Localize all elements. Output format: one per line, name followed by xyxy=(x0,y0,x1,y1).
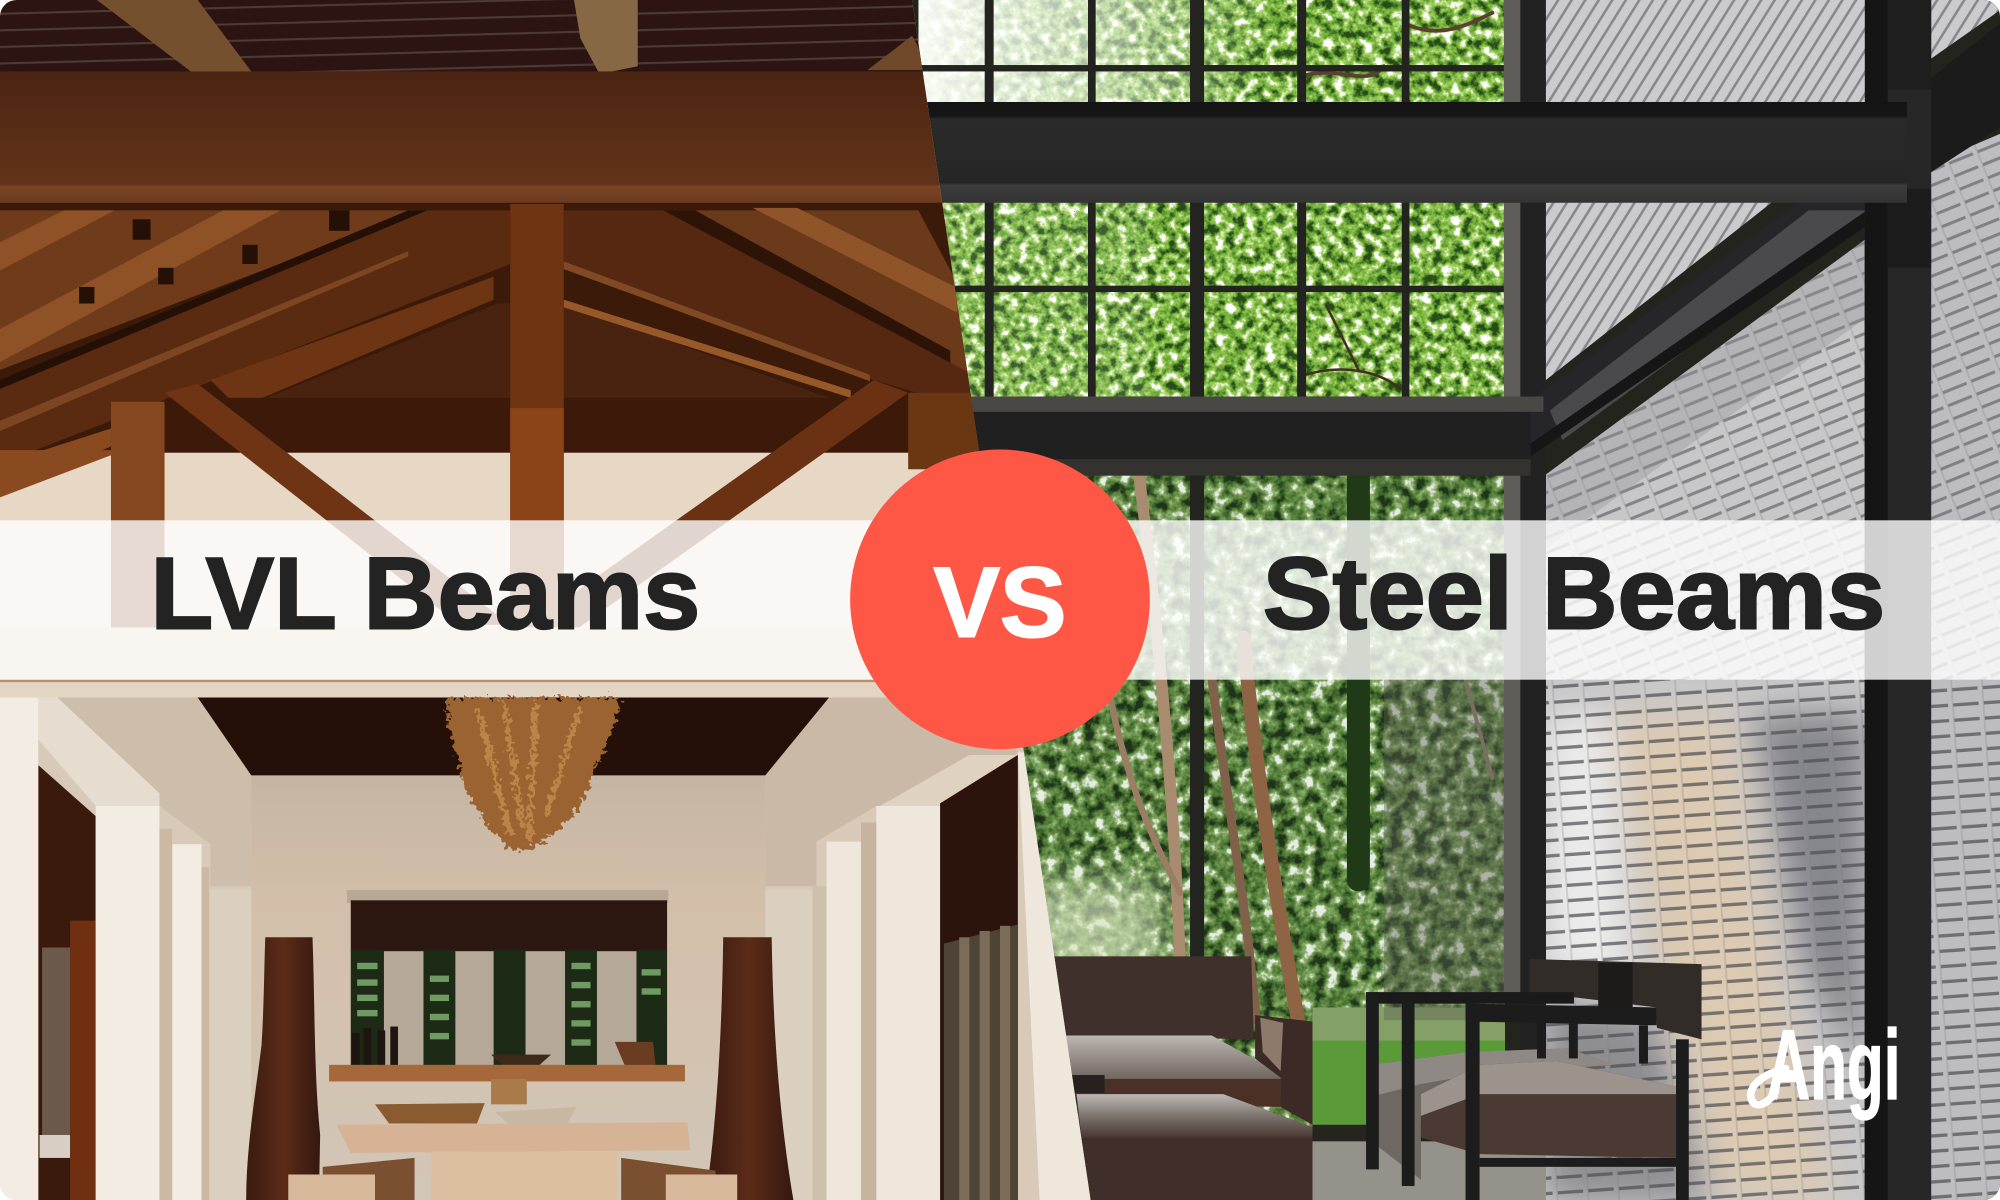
upper left boards xyxy=(0,210,421,370)
panel: steel beams photo xyxy=(893,0,2000,1200)
left door dark xyxy=(38,765,96,1200)
sofa xyxy=(1054,956,1312,1125)
diagonal steel beam xyxy=(1530,203,1865,456)
left main rafter xyxy=(0,210,510,464)
grass xyxy=(1312,1039,1505,1126)
interior side walls xyxy=(38,698,251,886)
back wall xyxy=(251,775,765,1200)
left vase xyxy=(246,937,320,1200)
title: LVL Beams: LVL Beams xyxy=(151,537,700,651)
steel column with grey inner xyxy=(1504,0,1520,992)
ceiling boards xyxy=(0,0,969,77)
translucent title band xyxy=(0,520,2000,680)
window mullions xyxy=(918,0,1505,982)
horizontal steel beam upper xyxy=(925,102,1907,203)
stools xyxy=(288,1158,737,1200)
VS badge xyxy=(850,450,1150,749)
window niche xyxy=(347,890,668,1066)
side table xyxy=(1071,1075,1105,1093)
table decor xyxy=(375,1079,577,1123)
left lower rafter xyxy=(210,277,494,408)
chairs xyxy=(1366,959,1702,1200)
cream cross beam xyxy=(0,627,1110,698)
truss dark backdrop xyxy=(0,203,1008,454)
brick wall triangle panel xyxy=(1546,201,1773,380)
upper corner log xyxy=(868,36,922,70)
logo: Angi: Angi xyxy=(1767,1010,1901,1121)
title: Steel Beams: Steel Beams xyxy=(1263,537,1885,651)
horizontal steel beam lower xyxy=(963,397,1543,476)
left post xyxy=(111,402,165,631)
right vase xyxy=(705,937,793,1200)
brick wall right panel xyxy=(1931,134,2000,1200)
window foliage xyxy=(918,0,1505,1149)
center post xyxy=(510,204,564,631)
brick wall lower panel xyxy=(1546,240,1865,1200)
bottles xyxy=(352,1027,398,1066)
upper right boards xyxy=(695,210,968,375)
tree trunks xyxy=(1110,13,1492,1122)
thatch lamp xyxy=(446,698,620,852)
bowls xyxy=(491,1055,551,1066)
dark ceiling xyxy=(198,698,829,775)
shelf xyxy=(329,1065,685,1081)
stone table xyxy=(337,1122,690,1200)
white pillars left xyxy=(0,698,202,1200)
window frame floor rail xyxy=(1312,1124,1435,1142)
inner triangle boards xyxy=(268,304,510,398)
right brace xyxy=(529,380,908,631)
steel column main xyxy=(1865,0,1931,1200)
right dark opening xyxy=(940,755,1018,1200)
brick wall upper panel xyxy=(1546,0,1866,102)
brick wall corner xyxy=(1931,0,2000,59)
glass reflection xyxy=(1384,676,1505,1020)
floor xyxy=(1312,1141,1546,1200)
right post xyxy=(908,393,978,469)
ottoman xyxy=(1077,1094,1312,1200)
log right xyxy=(574,0,638,74)
cream wall xyxy=(0,452,925,520)
right main rafter xyxy=(564,210,976,411)
white pillars right xyxy=(827,752,1097,1200)
log left xyxy=(97,0,252,72)
panel: LVL beams photo xyxy=(0,0,1110,1200)
main wood beam xyxy=(0,71,969,204)
left brace xyxy=(165,384,510,625)
top diagonal steel beam xyxy=(1931,24,2000,172)
VS badge: VS xyxy=(934,547,1066,658)
logo: Angi xyxy=(1751,1010,1901,1121)
